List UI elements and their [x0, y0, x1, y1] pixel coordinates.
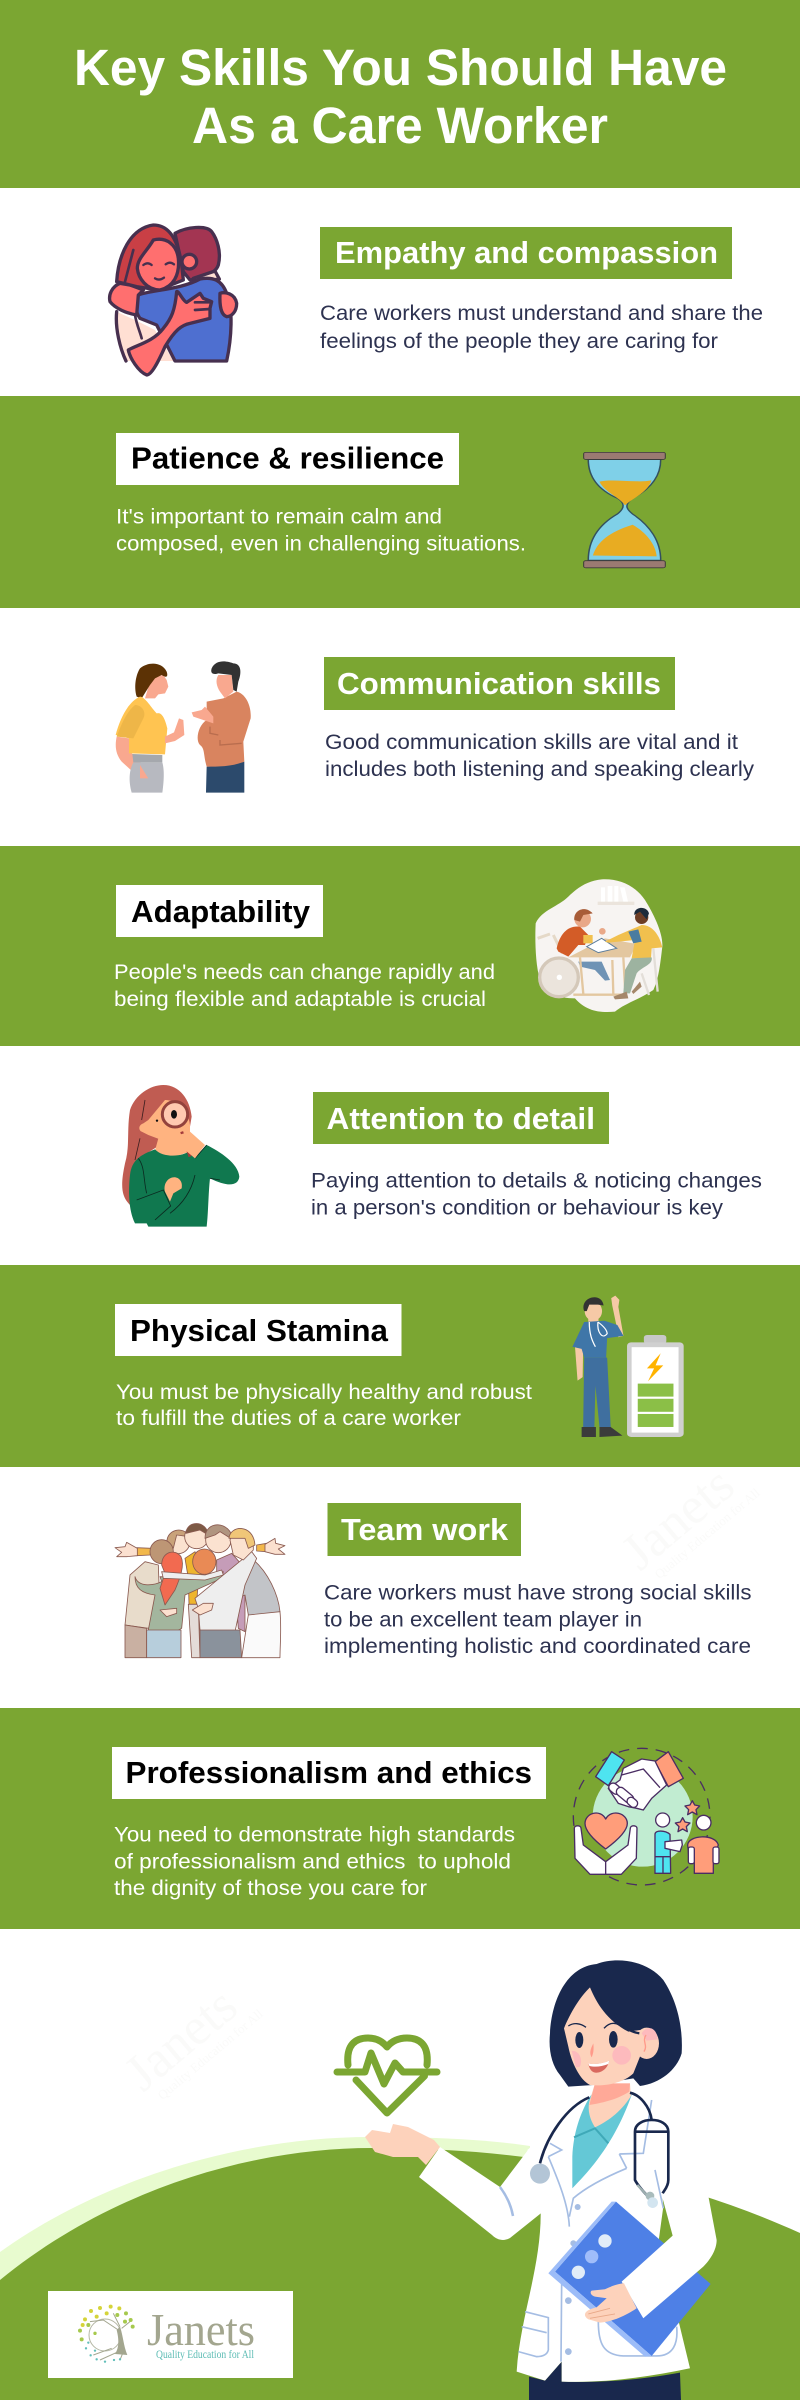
illustration: doctor: [365, 1960, 717, 2400]
heading: communication skills: Communication skills: [337, 666, 661, 701]
text: professionalism description: You need to demonstrate high standards: [114, 1824, 515, 1846]
panel: adaptability: [0, 846, 800, 1046]
text: professionalism description: of professionalism and ethics to uphold: [114, 1850, 511, 1874]
heading: attention to detail: Attention to detail: [326, 1101, 595, 1136]
text: team work description: to be an excellent team player in: [324, 1608, 642, 1632]
text: adaptability description: People's needs can change rapidly and: [114, 961, 495, 984]
panel: attention to detail: [0, 1046, 800, 1265]
text: patience description: composed, even in challenging situations.: [116, 532, 526, 556]
text: attention description: Paying attention to details & noticing changes: [311, 1170, 762, 1192]
text: team work description: implementing holistic and coordinated care: [324, 1635, 751, 1658]
heading: attention to detail: [313, 1092, 609, 1144]
text: adaptability description: being flexible and adaptable is crucial: [114, 988, 486, 1011]
icon: people at a table in a blob: [535, 879, 662, 1012]
green hill: [0, 2148, 800, 2400]
text: professionalism description: [114, 1824, 515, 1900]
heading: professionalism and ethics: [112, 1747, 546, 1799]
icon: heart with pulse line: [337, 2038, 437, 2113]
logo wordmark: Janets: [147, 2304, 255, 2355]
panel: closing illustration: [0, 1960, 800, 2400]
panel: physical stamina: [0, 1265, 800, 1467]
doctor arm and hand: [365, 2124, 560, 2240]
text: patience description: [116, 506, 526, 556]
watermark: Janets left: Janets: [114, 1977, 248, 2102]
heading: professionalism and ethics: Professionalism and ethics: [126, 1755, 532, 1790]
text: team work description: Care workers must have strong social skills: [324, 1582, 752, 1604]
watermark: Janets right: Janets: [611, 1456, 745, 1581]
text: stamina description: [116, 1381, 532, 1430]
text: attention description: in a person's condition or behaviour is key: [311, 1196, 724, 1220]
text: communication description: includes both listening and speaking clearly: [325, 758, 755, 781]
text: team work description: [324, 1582, 752, 1658]
panel: professionalism and ethics: [0, 1708, 800, 1929]
heading: physical stamina: [115, 1304, 402, 1356]
text: stamina description: to fulfill the duties of a care worker: [116, 1407, 461, 1430]
heading: communication skills: [324, 657, 675, 710]
heading: team work: Team work: [341, 1512, 509, 1547]
text: patience description: It's important to remain calm and: [116, 506, 442, 528]
watermark: Janets right: Quality Education for All: [652, 1485, 763, 1582]
heading: patience and resilience: Patience & resilience: [131, 440, 444, 476]
text: communication description: Good communication skills are vital and it: [325, 731, 738, 754]
text: communication description: [325, 731, 755, 781]
heading: physical stamina: Physical Stamina: [130, 1313, 389, 1348]
icon: handshake, heart and people: [573, 1748, 719, 1885]
icon: nurse and battery: [572, 1296, 684, 1437]
heading: adaptability: Adaptability: [131, 894, 311, 929]
panel: team work: [0, 1446, 800, 1708]
watermark: Janets left: Quality Education for All: [155, 2006, 266, 2103]
icon: two people hugging: [110, 225, 237, 375]
text: stamina description: You must be physically healthy and robust: [116, 1381, 532, 1404]
text: empathy description: [320, 302, 763, 353]
logo tagline: Quality Education for All: [156, 2349, 254, 2361]
heading: patience and resilience: [116, 433, 459, 485]
panel: empathy and compassion: [0, 188, 800, 396]
panel: communication skills: [0, 608, 800, 846]
title banner: As a Care Worker: [192, 97, 608, 154]
panel: patience and resilience: [0, 396, 800, 608]
light green hill edge: [0, 2137, 530, 2300]
text: attention description: [311, 1170, 762, 1220]
icon: two people talking: [116, 661, 251, 793]
icon: hourglass: [584, 452, 665, 568]
text: adaptability description: [114, 961, 495, 1011]
icon: group hug: [115, 1524, 285, 1658]
heading: empathy and compassion: [320, 227, 732, 279]
text: empathy description: feelings of the people they are caring for: [320, 330, 718, 353]
icon: woman with magnifying glass: [122, 1085, 239, 1227]
title banner: [0, 0, 800, 188]
logo card: [48, 2291, 293, 2378]
heading: team work: [328, 1503, 521, 1556]
heading: adaptability: [116, 885, 323, 937]
text: professionalism description: the dignity of those you care for: [114, 1877, 427, 1900]
heading: empathy and compassion: Empathy and compassion: [335, 235, 718, 270]
text: empathy description: Care workers must understand and share the: [320, 302, 763, 325]
doctor body: [517, 1960, 717, 2400]
title banner: Key Skills You Should Have: [74, 39, 727, 96]
logo tree: [78, 2305, 135, 2363]
